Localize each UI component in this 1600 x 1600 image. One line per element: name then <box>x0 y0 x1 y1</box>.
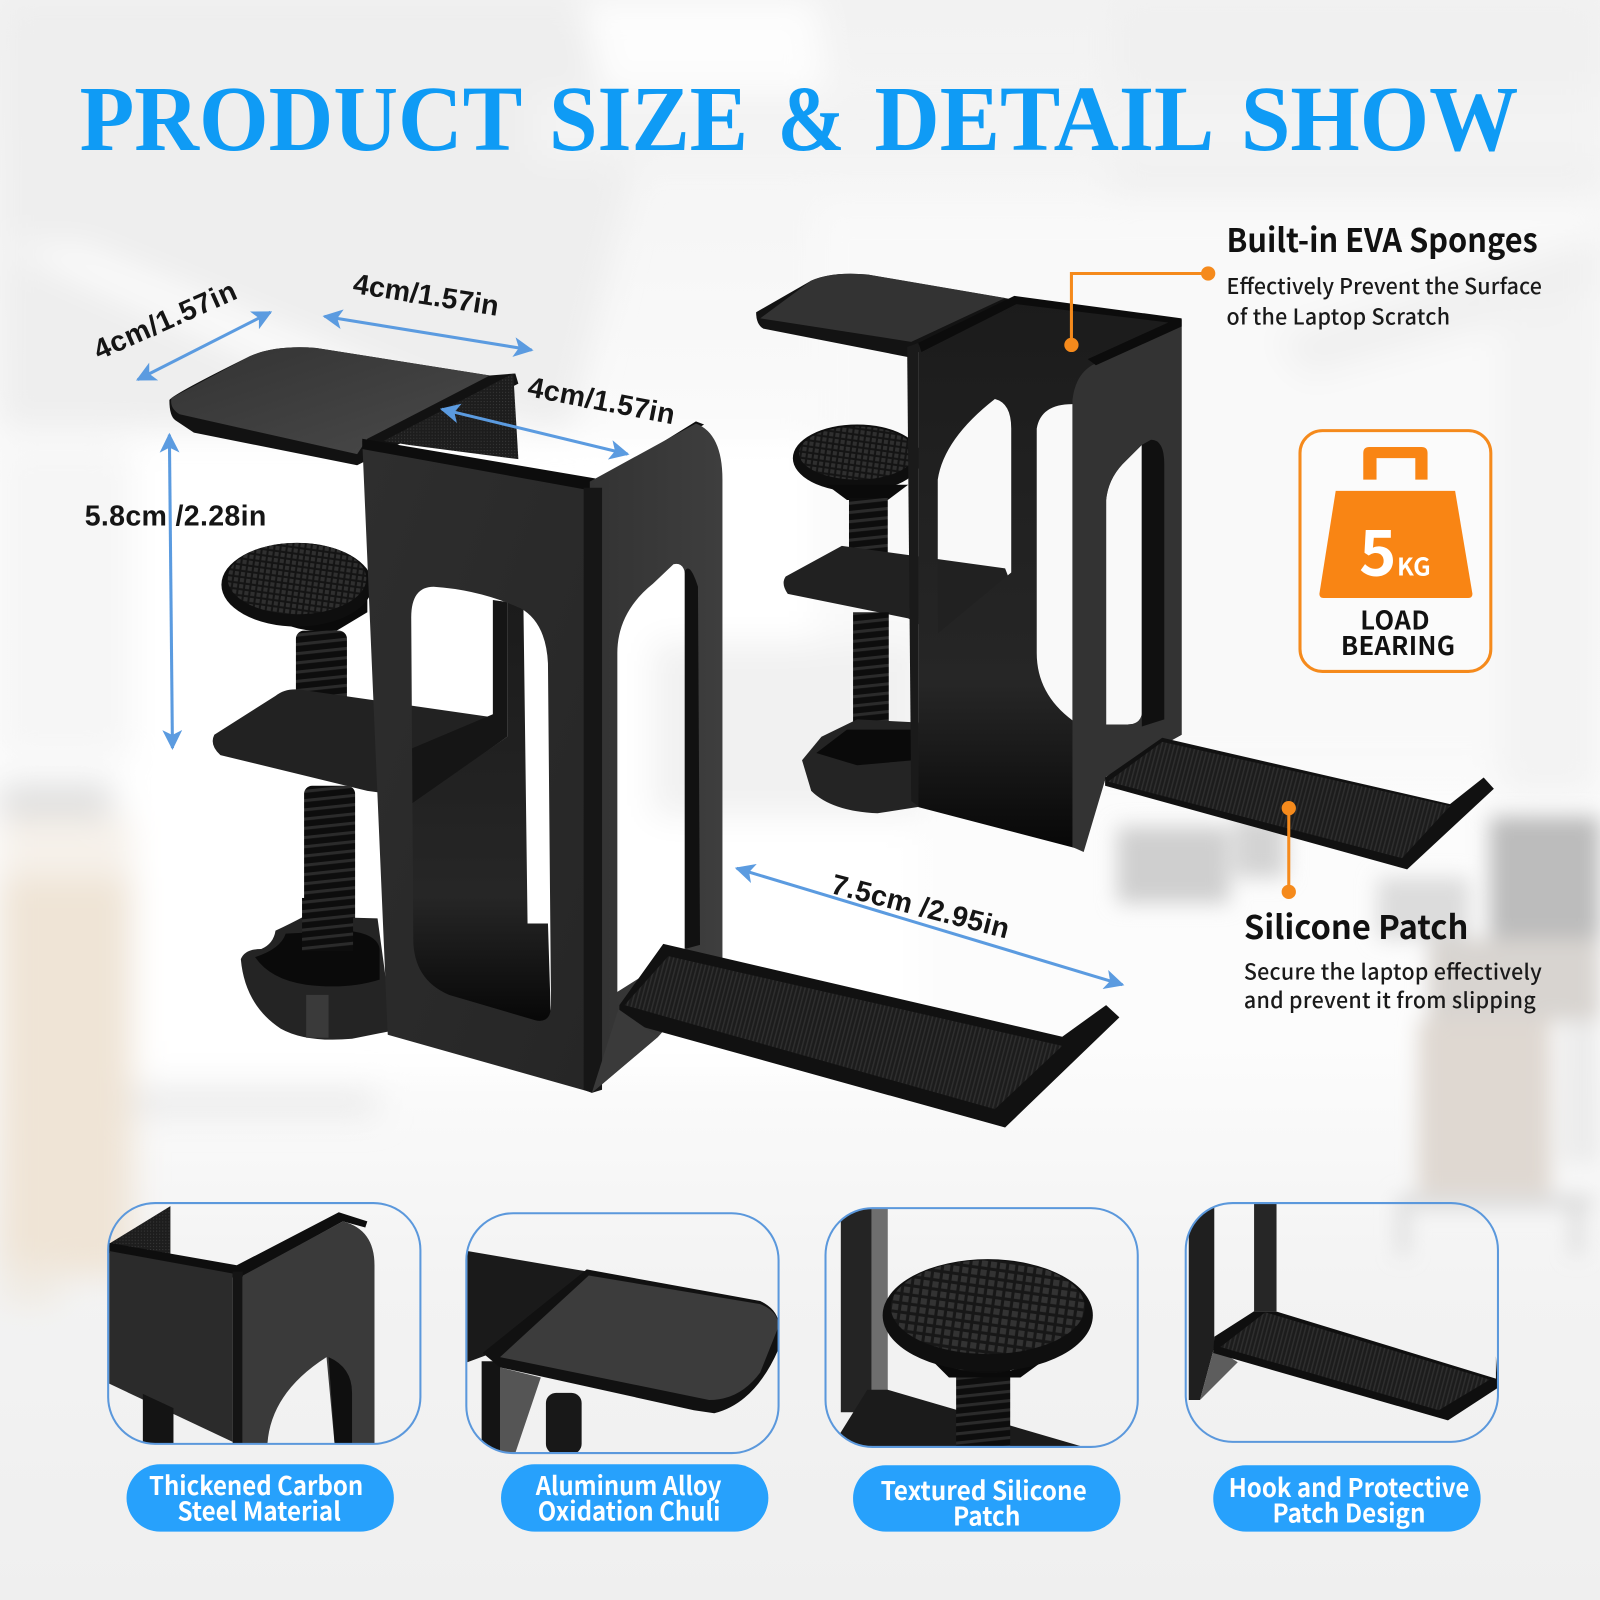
top rim <box>918 296 1182 365</box>
inner back wall through window <box>408 600 551 1022</box>
left outer strip <box>907 343 918 806</box>
detail panel 4: hook <box>1186 1203 1498 1442</box>
callout: Built-in EVA Sponges: of the Laptop Scratch <box>1227 300 1450 331</box>
detail panel 3: textured knob <box>826 1208 1138 1449</box>
detail panel 1: corner <box>107 1203 420 1445</box>
hook arm <box>592 944 1119 1128</box>
corner bevel <box>584 488 602 1093</box>
callout: Silicone Patch <box>1244 801 1542 1015</box>
title: SIZE <box>549 68 748 171</box>
upper screw <box>296 631 347 743</box>
dimension labels: 5.8cm /2.28in <box>85 501 266 533</box>
label: Thickened Carbon Steel Material <box>127 1464 394 1532</box>
icon: weight: 5 <box>1359 504 1397 595</box>
callout: Silicone Patch: Silicone Patch <box>1244 902 1468 949</box>
lower plate <box>213 689 505 798</box>
dimension labels <box>85 268 1013 945</box>
dimension labels: 4cm/1.57in <box>525 371 678 431</box>
label: Thickened Carbon Steel Material: Steel Material <box>178 1491 341 1528</box>
callout: Silicone Patch: and prevent it from slipping <box>1244 984 1536 1015</box>
inner silhouette with openings <box>918 297 1182 850</box>
callout: Built-in EVA Sponges: Effectively Prevent the Surface <box>1227 270 1542 301</box>
dimension arrows <box>138 312 1122 985</box>
lower plate <box>784 546 1010 635</box>
top knob <box>221 543 372 631</box>
top knob <box>793 424 921 500</box>
label: Hook and Protective Patch Design: Hook and Protective <box>1229 1468 1469 1505</box>
dimension labels: 4cm/1.57in <box>351 268 501 323</box>
title: PRODUCT <box>80 68 522 171</box>
callout: Silicone Patch: Secure the laptop effectively <box>1244 956 1542 987</box>
upper screw <box>849 498 888 559</box>
icon: weight <box>1319 447 1472 598</box>
load bearing badge: LOAD <box>1360 601 1430 638</box>
lower screw <box>853 612 889 730</box>
label: Textured Silicone Patch: Patch <box>953 1497 1020 1534</box>
front face edge bevel <box>362 421 704 490</box>
side window inner strip <box>685 569 700 949</box>
dimension labels: 7.5cm /2.95in <box>828 869 1013 945</box>
title: & <box>778 68 845 171</box>
icon: weight: KG <box>1397 549 1431 584</box>
right panel with window <box>1072 319 1182 852</box>
title: SHOW <box>1241 68 1518 171</box>
title <box>80 68 1518 171</box>
top plate <box>756 274 1010 357</box>
hook arm <box>1105 738 1494 869</box>
callout: Built-in EVA Sponges <box>1064 215 1542 352</box>
label: Textured Silicone Patch <box>853 1465 1120 1534</box>
callout: Built-in EVA Sponges: Built-in EVA Sponges <box>1227 215 1538 262</box>
label: Textured Silicone Patch: Textured Silicone <box>881 1471 1087 1508</box>
side face with window <box>590 423 722 1093</box>
lower screw <box>304 786 355 954</box>
label: Hook and Protective Patch Design: Patch Design <box>1272 1493 1426 1530</box>
top plate <box>169 347 518 465</box>
load bearing badge <box>1300 431 1491 671</box>
label: Thickened Carbon Steel Material: Thickened Carbon <box>149 1466 363 1503</box>
label: Hook and Protective Patch Design <box>1213 1465 1481 1532</box>
label: Aluminum Alloy Oxidation Chuli: Oxidation Chuli <box>538 1491 720 1528</box>
inner mesh wall <box>384 373 518 459</box>
bottom knob <box>802 719 923 813</box>
label: Aluminum Alloy Oxidation Chuli: Aluminum Alloy <box>535 1466 722 1503</box>
bottom knob <box>241 898 393 1040</box>
small clamp product <box>756 274 1494 869</box>
front face with window <box>362 441 590 1092</box>
dimension labels: 4cm/1.57in <box>89 275 242 367</box>
large clamp product <box>169 347 1119 1128</box>
title: DETAIL <box>874 68 1214 171</box>
right window strip <box>1142 440 1164 727</box>
detail panel 2: top plate <box>466 1213 779 1454</box>
label: Aluminum Alloy Oxidation Chuli <box>501 1464 768 1532</box>
load bearing badge: BEARING <box>1341 626 1455 663</box>
